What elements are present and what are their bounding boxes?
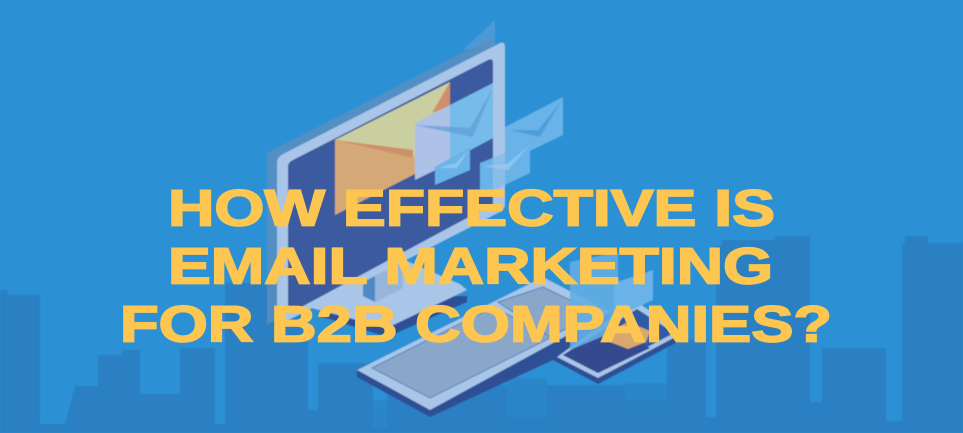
tablet [553, 302, 683, 384]
translucent envelope: small left [435, 147, 470, 185]
title line 3: FOR B2B COMPANIES? [120, 296, 832, 352]
title line 1: HOW EFFECTIVE IS [168, 180, 775, 236]
title [120, 180, 832, 352]
monitor stand [363, 254, 403, 302]
computer illustration [267, 20, 683, 417]
monitor bezel [277, 42, 505, 324]
skyline: soft gaps under the keyboard [373, 378, 667, 428]
city skyline [0, 236, 963, 433]
monitor base [300, 258, 467, 337]
large email envelope [335, 82, 450, 215]
monitor top glow [463, 20, 495, 50]
monitor back shadow [267, 37, 493, 325]
keyboard [357, 277, 610, 417]
bezel strip over envelopes [493, 58, 505, 210]
monitor screen [288, 59, 493, 312]
translucent envelope: right [505, 97, 563, 163]
translucent envelope: small right [480, 143, 530, 197]
trackpad [498, 287, 597, 337]
title line 2: EMAIL MARKETING [168, 238, 773, 294]
translucent envelope: centre [415, 83, 493, 180]
tablet orange hexagon [608, 322, 650, 349]
keyboard keys [372, 307, 552, 398]
translucent envelope: over keyboard [570, 252, 653, 350]
